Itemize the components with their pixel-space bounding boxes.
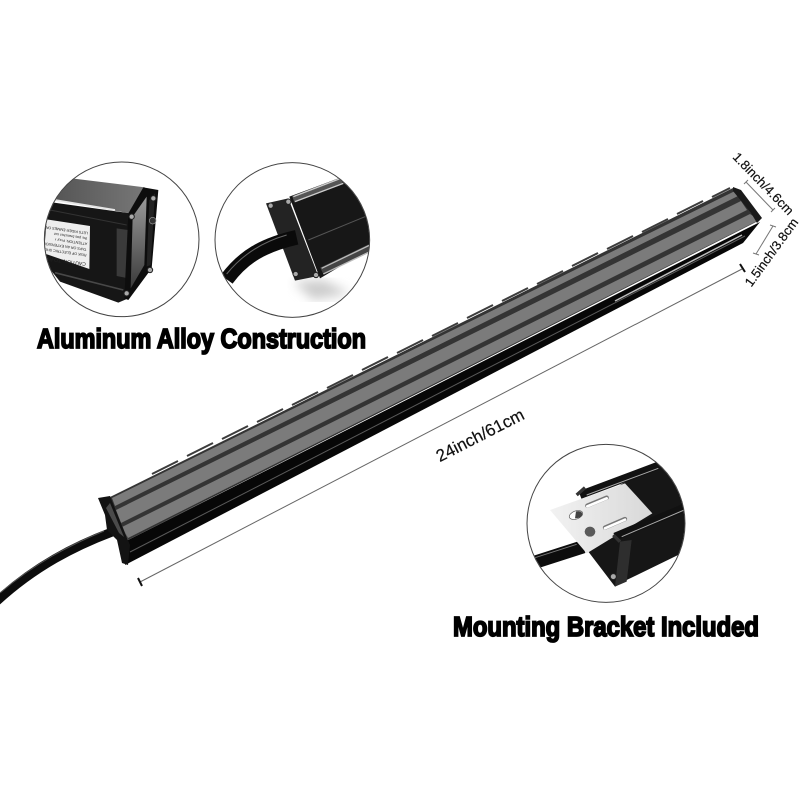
side face — [125, 222, 760, 565]
screws — [268, 199, 319, 278]
heading: aluminum alloy construction: Aluminum Alloy Construction — [37, 323, 366, 354]
warning label: CAUTION: TO REDU — [38, 254, 86, 267]
top face — [110, 188, 760, 540]
warning label — [45, 220, 90, 269]
top-edge tabs — [152, 188, 730, 474]
dimension: length — [138, 264, 745, 586]
end cap — [266, 198, 318, 281]
body — [588, 463, 688, 587]
detail circle: label end — [38, 162, 199, 317]
side body — [40, 202, 130, 303]
shadow — [293, 280, 350, 300]
power strip bar — [98, 187, 762, 565]
side highlights — [130, 235, 745, 552]
lower rail — [615, 507, 687, 537]
circle outline — [527, 444, 685, 602]
cable — [227, 237, 297, 279]
detail circle: cable end — [215, 163, 373, 317]
warning label: RISK OF ELECTRIC SHOCK — [38, 246, 87, 257]
warning label: LETS RIDER EMMES ON — [45, 225, 88, 235]
body — [289, 177, 373, 278]
detail circle: mounting bracket — [527, 444, 688, 602]
rails — [293, 181, 342, 199]
warning label: ATTENTION: Pour r — [54, 237, 87, 246]
top face — [53, 178, 145, 213]
rails — [580, 466, 658, 495]
socket — [149, 217, 156, 224]
end cap — [124, 187, 158, 300]
end cap left — [98, 496, 130, 565]
circle outline — [215, 163, 370, 317]
dimension: height: 1.5inch/3.8cm — [742, 215, 800, 289]
circle outline — [44, 162, 199, 317]
plate — [550, 483, 652, 553]
grey strips — [112, 191, 759, 538]
cable — [0, 531, 112, 602]
end cap right — [733, 187, 762, 223]
warning label: the pas brancher sur — [53, 232, 87, 240]
clips and screw — [577, 488, 620, 542]
warning label: TAPS OR AN EXTENSION — [43, 241, 87, 251]
dimension: width: 1.8inch/4.6cm — [730, 149, 797, 218]
cable — [532, 547, 583, 563]
dimension: length: 24inch/61cm — [433, 405, 527, 466]
screws — [124, 196, 156, 296]
